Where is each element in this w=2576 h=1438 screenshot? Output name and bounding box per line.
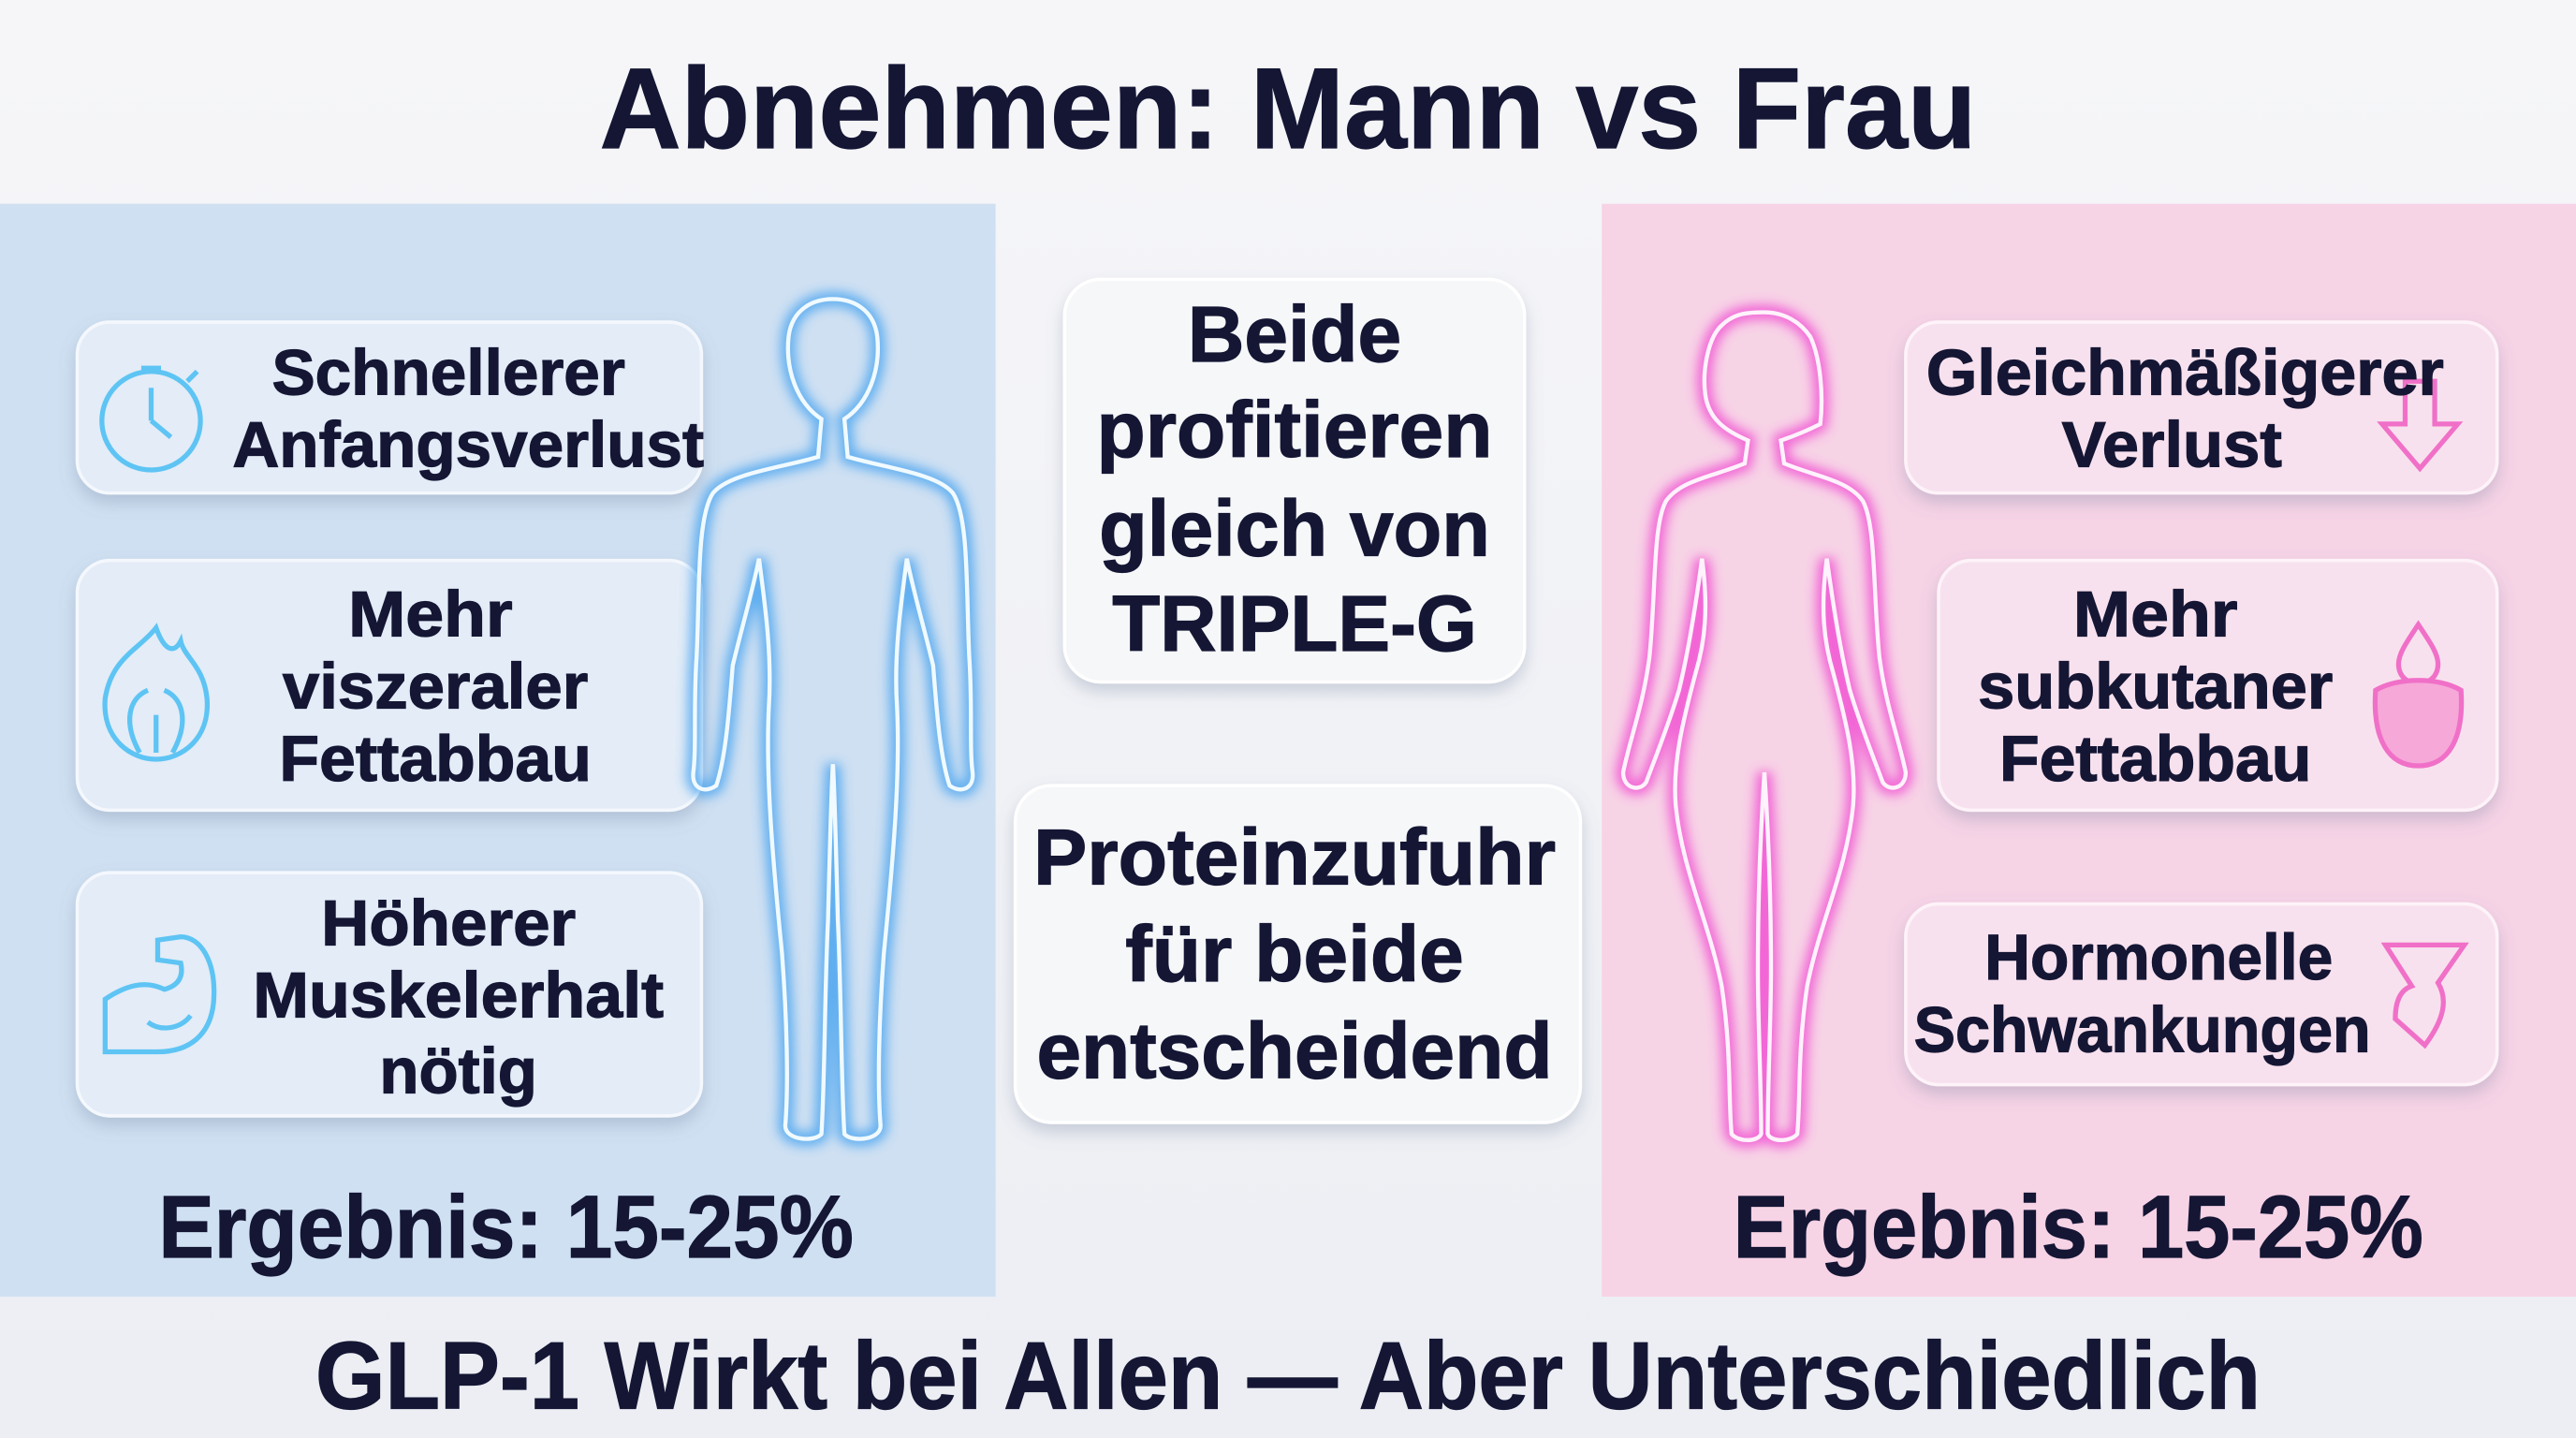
center card: Beide profitieren: Beide (1188, 290, 1401, 378)
card: Mehr subkutaner Fettabbau (1939, 561, 2497, 810)
center card: Proteinzufuhr: für beide (1125, 910, 1464, 998)
center card: Beide profitieren (1064, 279, 1525, 682)
card: Gleichmäßigerer Verlust (1906, 322, 2497, 493)
center card: Proteinzufuhr: entscheidend (1036, 1007, 1553, 1095)
card: Mehr subkutaner Fettabbau: Fettabbau (1999, 723, 2311, 795)
center card: Beide profitieren: gleich von (1099, 484, 1490, 572)
center card: Beide profitieren: profitieren (1097, 386, 1493, 474)
icon: hormone symbol (2385, 945, 2465, 1045)
card: Schnellerer Anfangsverlust: Anfangsverlust (232, 409, 704, 481)
card: Mehr subkutaner Fettabbau: Mehr (2073, 578, 2237, 650)
result: Frau: Ergebnis: 15-25% (1734, 1178, 2423, 1277)
icon: muscle arm (105, 937, 214, 1051)
card: Mehr subkutaner Fettabbau: subkutaner (1978, 651, 2333, 723)
icon: fat drop (2375, 624, 2462, 766)
card: Mehr viszeraler Fettabbau: Mehr (348, 578, 513, 650)
card: Schnellerer Anfangsverlust: Schnellerer (271, 336, 625, 408)
card: Höherer Muskelerhalt nötig (77, 873, 701, 1116)
card: Schnellerer Anfangsverlust (77, 322, 704, 493)
icon: down arrow (2382, 381, 2458, 468)
icon: flame (105, 628, 207, 759)
panel: Mann (0, 204, 996, 1297)
card: Gleichmäßigerer Verlust: Verlust (2062, 409, 2282, 481)
card: Hormonelle Schwankungen: Schwankungen (1914, 993, 2371, 1065)
card: Höherer Muskelerhalt nötig: Muskelerhalt (253, 960, 664, 1032)
card: Mehr viszeraler Fettabbau: Fettabbau (279, 723, 592, 795)
title: Abnehmen: Mann vs Frau (600, 45, 1976, 173)
center card: Proteinzufuhr: Proteinzufuhr (1033, 813, 1556, 901)
result: Mann: Ergebnis: 15-25% (158, 1178, 854, 1277)
card: Gleichmäßigerer Verlust: Gleichmäßigerer (1926, 336, 2444, 408)
card: Mehr viszeraler Fettabbau: viszeraler (283, 651, 588, 723)
center card: Beide profitieren: TRIPLE-G (1112, 580, 1477, 668)
card: Höherer Muskelerhalt nötig: nötig (379, 1034, 537, 1107)
figure: woman outline (1623, 313, 1906, 1140)
figure: man outline (694, 299, 973, 1139)
icon: stopwatch (102, 368, 200, 470)
panel: Frau (1602, 204, 2576, 1297)
card: Hormonelle Schwankungen (1906, 903, 2497, 1085)
bottom tagline: GLP-1 Wirkt bei Allen — Aber Unterschiedlich (315, 1322, 2261, 1429)
card: Mehr viszeraler Fettabbau (77, 561, 701, 810)
center card: Proteinzufuhr (1016, 785, 1580, 1123)
card: Höherer Muskelerhalt nötig: Höherer (321, 887, 576, 959)
card: Hormonelle Schwankungen: Hormonelle (1984, 921, 2333, 993)
